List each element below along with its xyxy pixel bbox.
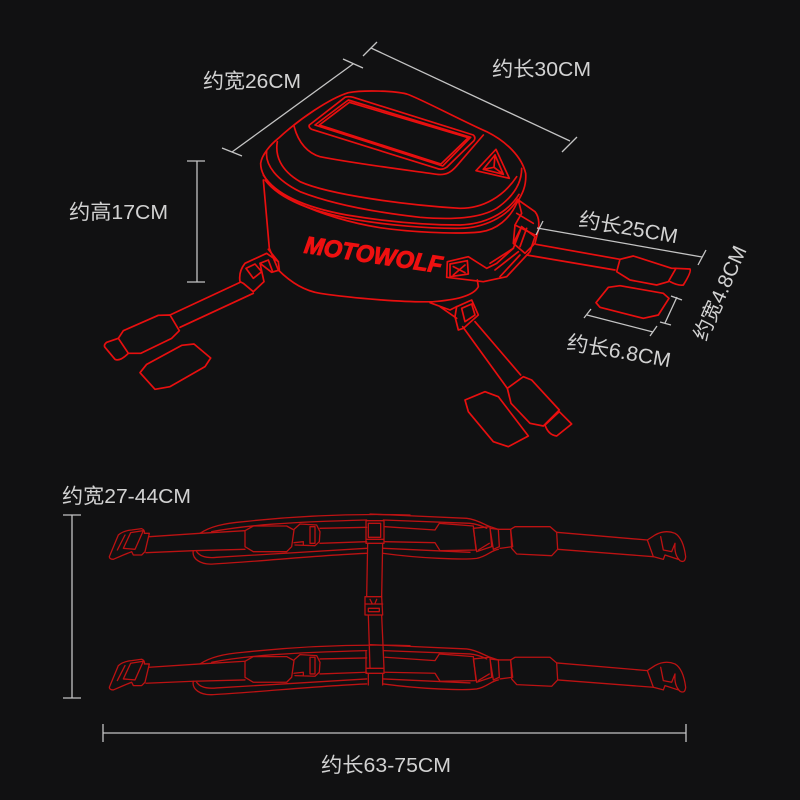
screen window xyxy=(309,97,475,169)
left-front strap with pad xyxy=(104,249,279,389)
dimension label: pad width 4.8CM xyxy=(660,242,752,344)
dimension label: length 30CM xyxy=(363,42,591,152)
dimension label: strap length 25CM: 约长25CM xyxy=(577,208,680,248)
upper strap xyxy=(109,514,686,564)
triangle logo xyxy=(476,149,509,178)
dimension label: harness length 63-75CM xyxy=(103,724,686,777)
dimension label: pad length 6.8CM xyxy=(565,309,673,372)
dimension label: length 30CM: 约长30CM xyxy=(492,58,591,81)
dimension label: pad width 4.8CM: 约宽4.8CM xyxy=(690,242,752,344)
dimension label: strap length 25CM xyxy=(536,208,706,265)
side patch and pocket xyxy=(447,200,539,282)
dimension label: harness width 27-44CM xyxy=(62,485,191,698)
dimension label: pad length 6.8CM: 约长6.8CM xyxy=(565,331,673,372)
brand wordmark: MOTOWOLF xyxy=(302,232,446,279)
right strap, pad and front strap xyxy=(430,244,690,447)
dimension label: width 26CM: 约宽26CM xyxy=(203,70,301,93)
tank bag illustration xyxy=(261,91,539,302)
dimension label: height 17CM xyxy=(69,161,205,282)
dimension label: width 26CM xyxy=(203,59,363,156)
dimension label: harness width 27-44CM: 约宽27-44CM xyxy=(62,485,191,508)
bag lid and body outline xyxy=(261,91,526,302)
dimension label: harness length 63-75CM: 约长63-75CM xyxy=(321,754,451,777)
dimension label: height 17CM: 约高17CM xyxy=(69,201,168,224)
center connecting strap xyxy=(365,521,384,685)
harness straps xyxy=(109,514,686,695)
lower strap xyxy=(109,645,686,695)
